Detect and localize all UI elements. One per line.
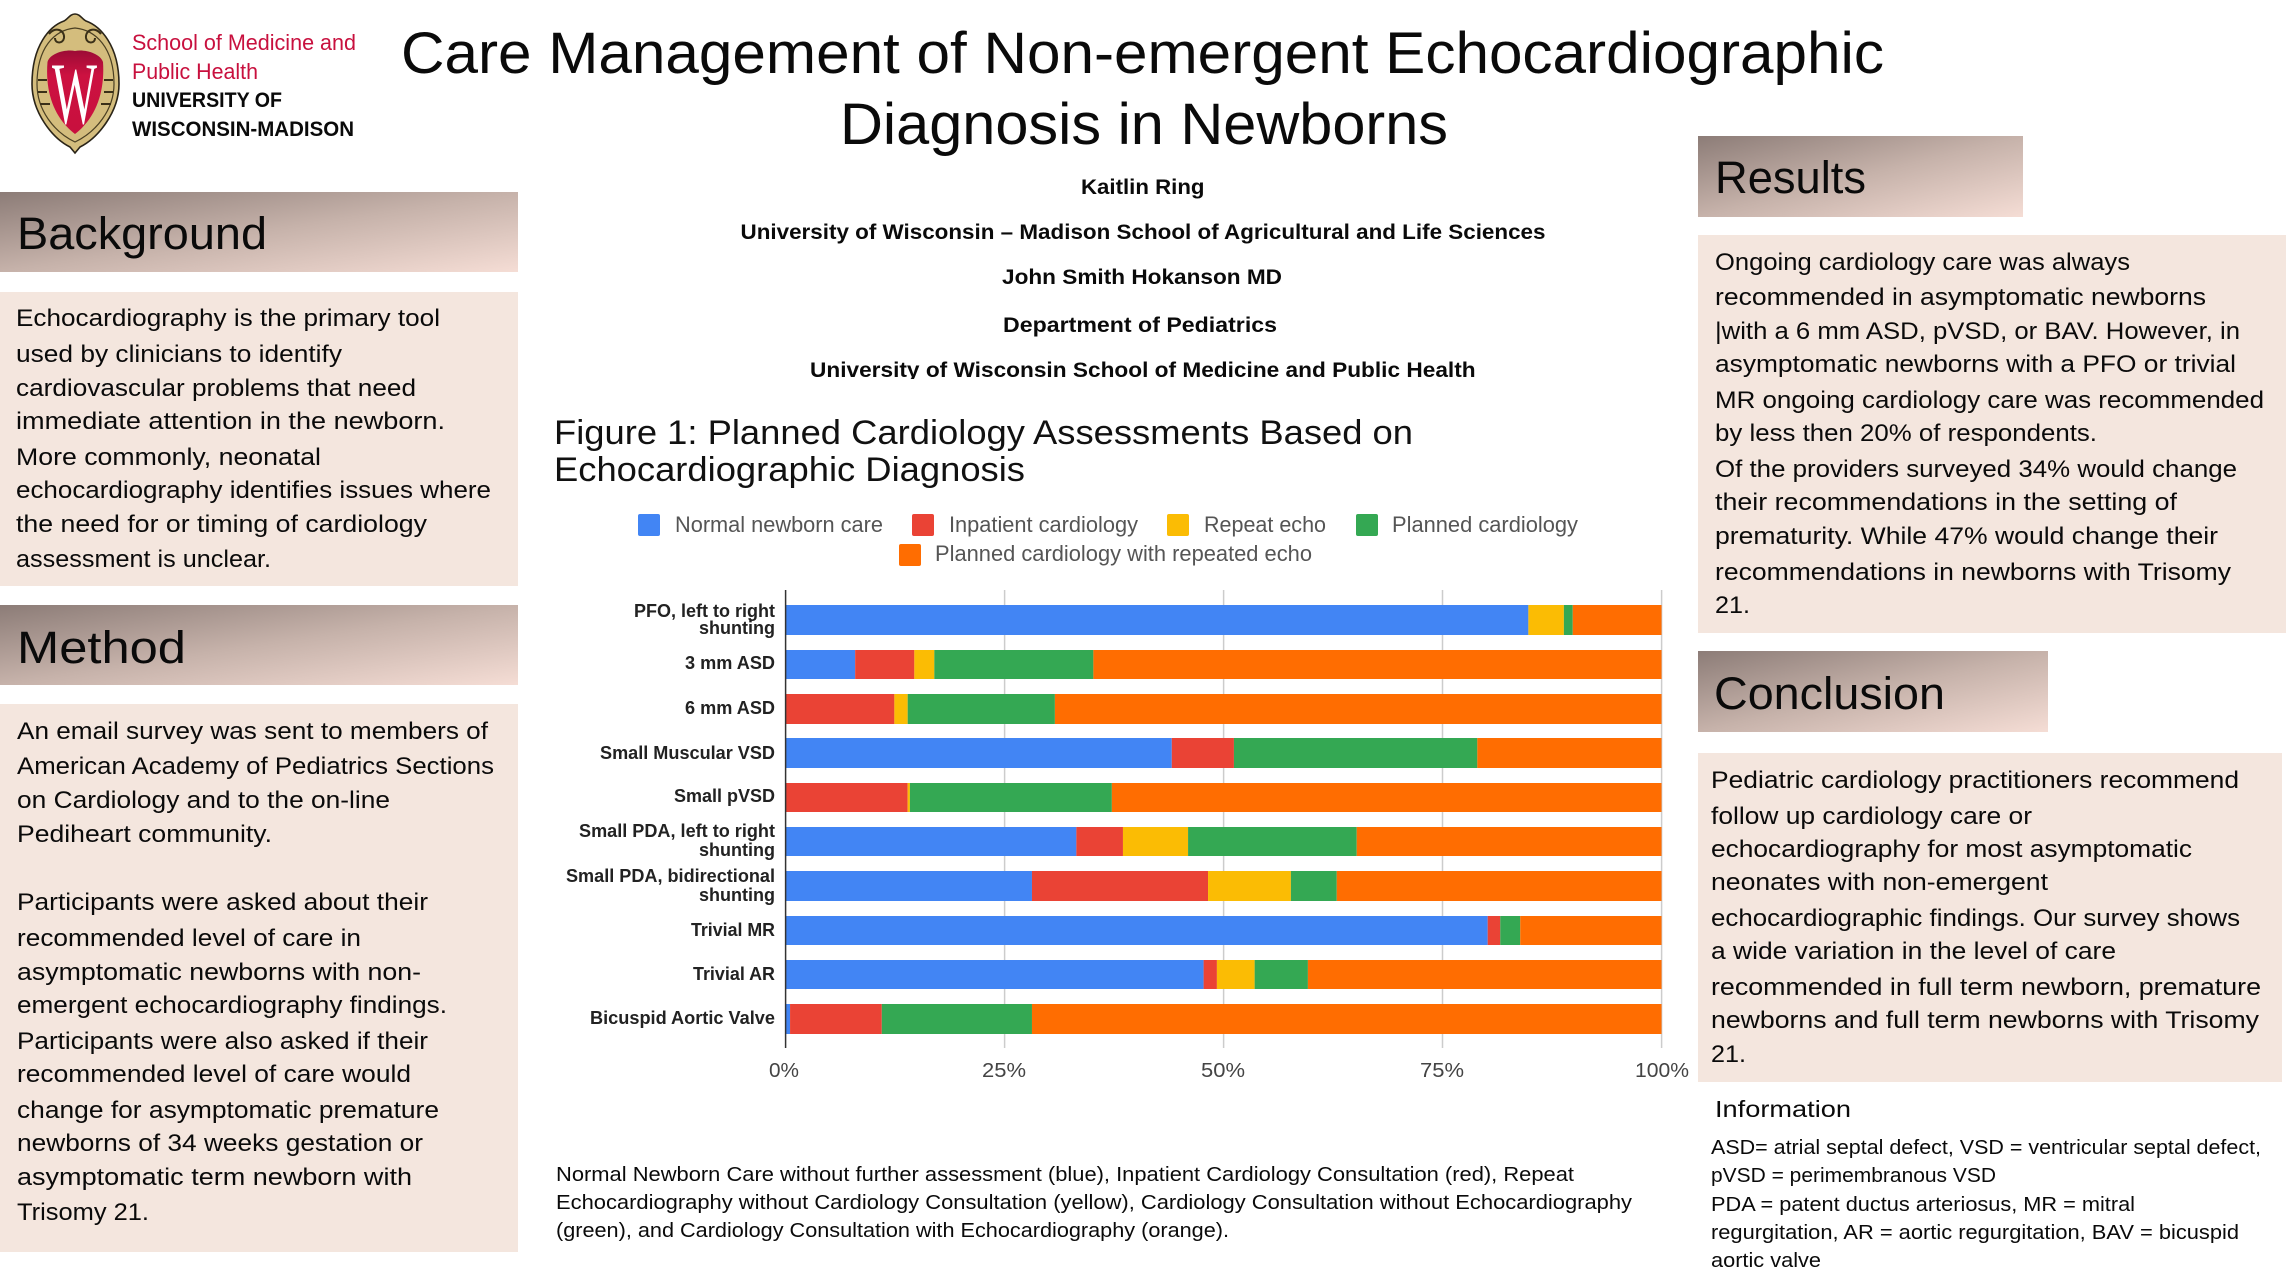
- text block: Method body: American Academy of Pediatrics Sections: [17, 753, 494, 780]
- wordmark: school and university name: School of Medicine and: [132, 30, 356, 55]
- chart legend: Repeat echo: [1204, 512, 1326, 537]
- wordmark: school and university name: [132, 30, 356, 141]
- text block: Conclusion body: neonates with non-emergent: [1711, 869, 2048, 896]
- chart category labels: shunting: [699, 885, 775, 905]
- text block: Results body: [1698, 235, 2286, 633]
- title: [401, 21, 1884, 157]
- text block: Background body: cardiovascular problems that need: [16, 375, 416, 402]
- text block: Results body: their recommendations in the setting of: [1715, 489, 2177, 516]
- text block: figure caption: Echocardiography without Cardiology Consultation (yellow), Cardiology Consultation without Echocardiography: [556, 1192, 1632, 1214]
- chart legend: [638, 512, 1578, 566]
- heading: Results: Results: [1715, 152, 1866, 203]
- text block: Conclusion body: echocardiography for most asymptomatic: [1711, 836, 2192, 863]
- authors and affiliations: University of Wisconsin – Madison School of Agricultural and Life Sciences: [740, 220, 1546, 244]
- chart category labels: PFO, left to right: [634, 601, 775, 621]
- Small pVSD: [786, 783, 908, 812]
- chart category labels: 3 mm ASD: [685, 653, 775, 673]
- authors and affiliations: John Smith Hokanson MD: [1002, 265, 1282, 289]
- 3 mm ASD: [786, 650, 855, 679]
- text block: abbreviations: [1711, 1137, 2261, 1272]
- text block: Conclusion body: follow up cardiology care or: [1711, 803, 2032, 830]
- chart category labels: shunting: [699, 840, 775, 860]
- text block: Results body: prematurity. While 47% would change their: [1715, 523, 2218, 550]
- chart title: Figure 1: Planned Cardiology Assessments Based on: [554, 414, 1413, 452]
- text block: Background body: the need for or timing of cardiology: [16, 511, 428, 538]
- text block: Results body: Of the providers surveyed 34% would change: [1715, 456, 2237, 483]
- panel: Results: [1698, 136, 2286, 633]
- chart category labels: Bicuspid Aortic Valve: [590, 1008, 775, 1028]
- Small PDA, left to right: [786, 827, 1076, 856]
- chart title: [554, 414, 1413, 489]
- panel: Information abbreviations: [1711, 1096, 2261, 1272]
- text block: Results body: |with a 6 mm ASD, pVSD, or BAV. However, in: [1715, 318, 2240, 345]
- PFO: [786, 605, 1528, 635]
- text block: Results body: Ongoing cardiology care was always: [1715, 249, 2130, 276]
- chart x axis tick labels: 25%: [982, 1059, 1026, 1082]
- text block: figure caption: Normal Newborn Care without further assessment (blue), Inpatient Cardiology Consultation (red), Repeat: [556, 1164, 1574, 1186]
- heading: Background: [0, 192, 518, 272]
- text block: Background body: [0, 292, 518, 586]
- authors and affiliations: University of Wisconsin School of Medicine and Public Health: [810, 358, 1476, 382]
- chart category labels: 6 mm ASD: [685, 698, 775, 718]
- text block: Conclusion body: recommended in full term newborn, premature: [1711, 974, 2261, 1001]
- text block: Conclusion body: Pediatric cardiology practitioners recommend: [1711, 767, 2239, 794]
- text block: Background body: More commonly, neonatal: [16, 444, 321, 471]
- text block: Method body: recommended level of care would: [17, 1061, 411, 1088]
- chart category labels: Trivial AR: [693, 964, 775, 984]
- text block: Method body: recommended level of care in: [17, 925, 361, 952]
- text block: Method body: Participants were asked about their: [17, 889, 428, 916]
- text block: abbreviations: PDA = patent ductus arteriosus, MR = mitral: [1711, 1194, 2135, 1216]
- title: Care Management of Non-emergent Echocardiographic: [401, 21, 1884, 86]
- chart legend: Planned cardiology: [1392, 512, 1578, 537]
- chart category labels: Small PDA, left to right: [579, 821, 775, 841]
- text block: Background body: Echocardiography is the primary tool: [16, 305, 440, 332]
- text block: Conclusion body: a wide variation in the level of care: [1711, 938, 2116, 965]
- text block: Background body: echocardiography identifies issues where: [16, 477, 491, 504]
- text block: Method body: asymptomatic newborns with non-: [17, 959, 421, 986]
- text block: figure caption: (green), and Cardiology Consultation with Echocardiography (orange).: [556, 1220, 1229, 1242]
- authors and affiliations: [740, 175, 1546, 382]
- chart legend: Normal newborn care: [675, 512, 883, 537]
- chart category labels: Trivial MR: [691, 920, 775, 940]
- text block: Conclusion body: 21.: [1711, 1041, 1746, 1068]
- text block: figure caption: [556, 1164, 1632, 1242]
- chart x axis tick labels: 75%: [1420, 1059, 1464, 1082]
- text block: Background body: assessment is unclear.: [16, 546, 271, 573]
- heading: Results: [1698, 136, 2023, 217]
- panel: Background: [0, 192, 518, 586]
- text block: Method body: An email survey was sent to members of: [17, 718, 488, 745]
- text block: Results body: 21.: [1715, 592, 1750, 619]
- text block: abbreviations: pVSD = perimembranous VSD: [1711, 1165, 1996, 1187]
- text block: Method body: asymptomatic term newborn with: [17, 1164, 412, 1191]
- chart legend: Inpatient cardiology: [949, 512, 1138, 537]
- icon: UW crest: [32, 14, 119, 153]
- text block: Results body: recommendations in newborns with Trisomy: [1715, 559, 2232, 586]
- text block: Background body: used by clinicians to identify: [16, 341, 343, 368]
- text block: Method body: emergent echocardiography findings.: [17, 992, 447, 1019]
- heading: Information: Information: [1715, 1096, 1851, 1122]
- heading: Conclusion: Conclusion: [1714, 668, 1945, 719]
- heading: Method: [0, 605, 518, 685]
- text block: abbreviations: ASD= atrial septal defect, VSD = ventricular septal defect,: [1711, 1137, 2261, 1159]
- text block: Results body: MR ongoing cardiology care was recommended: [1715, 387, 2264, 414]
- text block: Conclusion body: newborns and full term newborns with Trisomy: [1711, 1007, 2260, 1034]
- text block: Method body: Participants were also asked if their: [17, 1028, 428, 1055]
- Small PDA, bidirectional: [786, 871, 1032, 901]
- authors and affiliations: Department of Pediatrics: [1003, 313, 1277, 337]
- chart category labels: shunting: [699, 618, 775, 638]
- text block: Method body: Trisomy 21.: [17, 1199, 149, 1226]
- bar chart: stacked bars: [786, 590, 1662, 1048]
- chart title: Echocardiographic Diagnosis: [554, 451, 1025, 489]
- logo: university crest and wordmark: [32, 14, 356, 153]
- text block: Conclusion body: echocardiographic findings. Our survey shows: [1711, 905, 2240, 932]
- heading: Background: Background: [17, 208, 267, 259]
- chart category labels: Small Muscular VSD: [600, 743, 775, 763]
- wordmark: school and university name: Public Health: [132, 59, 258, 84]
- heading: Method: Method: [17, 622, 186, 673]
- text block: Method body: [0, 704, 518, 1252]
- text block: Results body: asymptomatic newborns with a PFO or trivial: [1715, 351, 2236, 378]
- text block: abbreviations: regurgitation, AR = aortic regurgitation, BAV = bicuspid: [1711, 1222, 2239, 1244]
- authors and affiliations: Kaitlin Ring: [1081, 175, 1204, 199]
- Bicuspid Aortic Valve: [786, 1004, 790, 1034]
- panel: Method: [0, 605, 518, 1252]
- panel: Figure 1 chart: [540, 379, 1698, 1134]
- text block: Method body: Pediheart community.: [17, 821, 272, 848]
- text block: Method body: newborns of 34 weeks gestation or: [17, 1130, 423, 1157]
- chart x axis tick labels: 100%: [1635, 1059, 1689, 1082]
- wordmark: school and university name: UNIVERSITY OF: [132, 89, 282, 112]
- wordmark: school and university name: WISCONSIN-MADISON: [132, 118, 354, 141]
- text block: Results body: recommended in asymptomatic newborns: [1715, 284, 2206, 311]
- text block: Method body: on Cardiology and to the on-line: [17, 787, 390, 814]
- Small Muscular VSD: [786, 738, 1172, 768]
- 6 mm ASD: [786, 694, 894, 724]
- title: Diagnosis in Newborns: [840, 92, 1448, 157]
- Trivial MR: [786, 916, 1488, 945]
- Trivial AR: [786, 960, 1204, 989]
- text block: Results body: by less then 20% of respondents.: [1715, 420, 2097, 447]
- text block: Conclusion body: [1698, 753, 2282, 1082]
- chart category labels: Small PDA, bidirectional: [566, 866, 775, 886]
- chart legend: Planned cardiology with repeated echo: [935, 541, 1312, 566]
- chart category labels: [566, 601, 775, 1028]
- chart x axis tick labels: 50%: [1201, 1059, 1245, 1082]
- text block: Method body: change for asymptomatic premature: [17, 1097, 439, 1124]
- panel: Conclusion: [1698, 651, 2282, 1082]
- chart category labels: Small pVSD: [674, 786, 775, 806]
- heading: Conclusion: [1698, 651, 2048, 732]
- chart x axis tick labels: 0%: [769, 1059, 799, 1082]
- icon: UW crest: W: [52, 46, 97, 143]
- text block: abbreviations: aortic valve: [1711, 1250, 1821, 1272]
- chart x axis tick labels: [769, 1059, 1689, 1082]
- text block: Background body: immediate attention in the newborn.: [16, 408, 445, 435]
